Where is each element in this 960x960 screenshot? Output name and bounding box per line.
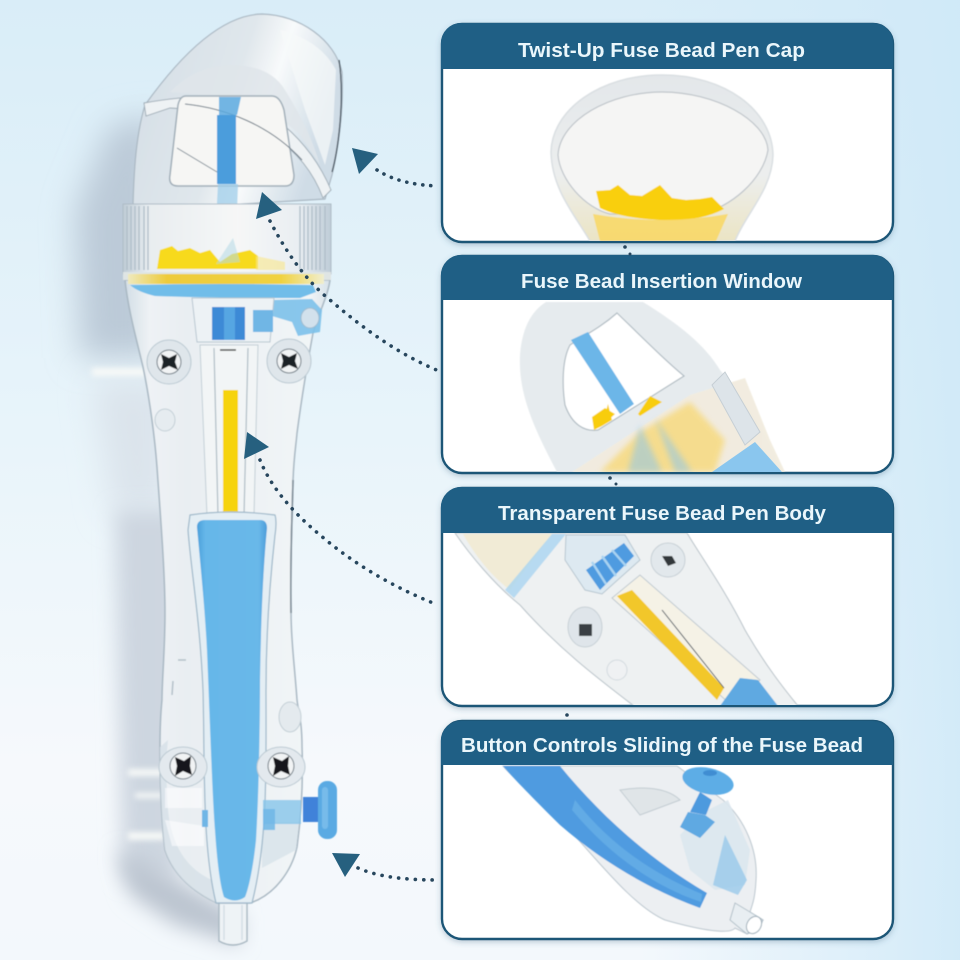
blue ring [130, 284, 322, 336]
photo: pen head window [520, 302, 785, 472]
blue rod [215, 97, 241, 245]
panel: button control [441, 721, 893, 939]
slider track [192, 298, 274, 516]
photo: pen body [455, 533, 798, 706]
panel heading 2: Fuse Bead Insertion Window [521, 271, 802, 293]
pen cap [133, 14, 342, 205]
slide button [202, 781, 337, 839]
screw top right [267, 339, 311, 383]
photo: bowl with beads [551, 75, 773, 241]
pen cast shadow [75, 115, 240, 945]
panel card 1 [442, 24, 893, 242]
panel heading 3: Transparent Fuse Bead Pen Body [498, 503, 827, 525]
pen tip tube [219, 900, 247, 945]
panel header 2 [441, 255, 893, 300]
illustration: fuse bead pen [123, 14, 342, 945]
arrow: to pen cap [352, 148, 439, 186]
arrow: to pen body [244, 432, 438, 605]
panel heading 4: Button Controls Sliding of the Fuse Bead [461, 735, 863, 757]
pen collar [123, 204, 331, 280]
panel header 4 [441, 721, 893, 765]
gold ring [128, 274, 324, 284]
photo: pen end with button [503, 763, 765, 936]
screw top left [147, 340, 191, 384]
yellow beads [157, 238, 285, 270]
panel: insertion window [441, 255, 893, 473]
screw bottom right [257, 747, 305, 787]
bead insertion window [170, 96, 302, 186]
panel heading 1: Twist-Up Fuse Bead Pen Cap [518, 40, 805, 62]
panel card 4 [442, 721, 893, 939]
blue grip [188, 512, 276, 903]
panel header 3 [441, 487, 893, 533]
arrow: to insertion window [256, 192, 439, 371]
panel card 2 [442, 256, 893, 473]
panel card 3 [442, 488, 893, 706]
yellow fuse bead [223, 390, 238, 512]
arrow: to slide button [332, 853, 436, 880]
connector dots between panels [565, 245, 632, 717]
panel header 1 [441, 23, 893, 69]
panel: twist-up cap [441, 23, 893, 242]
panel: pen body [441, 487, 893, 706]
screw bottom left [159, 747, 207, 787]
pen body [125, 280, 330, 903]
